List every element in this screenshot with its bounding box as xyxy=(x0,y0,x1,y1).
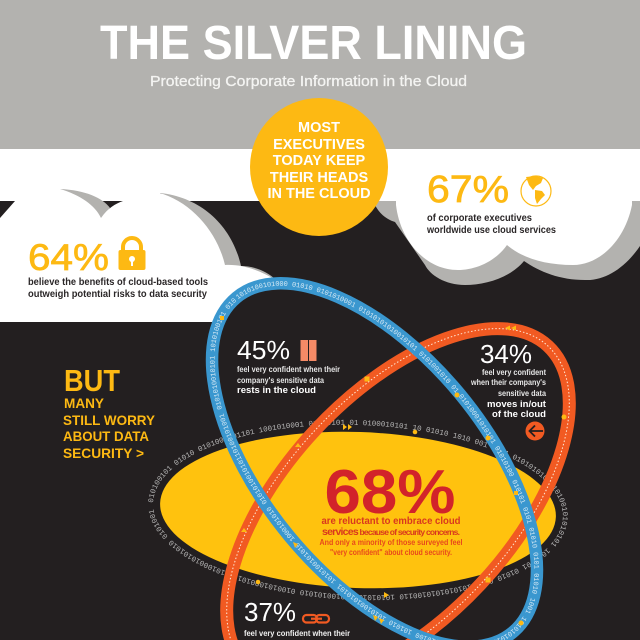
text: 68% caption: are reluctant to embrace cloud xyxy=(322,515,460,527)
cloud: left xyxy=(0,189,276,322)
text: 68% caption xyxy=(320,515,462,557)
white band xyxy=(0,149,640,201)
yellow ellipse xyxy=(157,425,559,595)
orange orbit xyxy=(165,269,631,640)
stat: 45% xyxy=(237,335,340,396)
text: 34% caption: when their company's xyxy=(470,378,546,387)
text: 64% caption: outweigh potential risks to data security xyxy=(28,289,207,300)
blue orbit markers xyxy=(220,316,524,626)
text: 45% caption: feel very confident when their xyxy=(237,365,340,374)
icon: chain link xyxy=(303,615,329,622)
heading: but many still worry: BUT xyxy=(64,363,120,398)
heading: but many still worry: STILL WORRY xyxy=(63,412,156,428)
subtitle: Protecting Corporate Information in the Cloud xyxy=(150,73,467,90)
text: 34% caption xyxy=(470,368,547,420)
heading: but many still worry xyxy=(63,363,156,461)
heading: but many still worry: SECURITY > xyxy=(63,445,144,461)
icon: globe xyxy=(521,176,551,206)
text: 34% caption: sensitive data xyxy=(498,389,546,398)
title: THE SILVER LINING xyxy=(100,17,527,70)
stat: 37% xyxy=(244,597,350,638)
icon: pause bars xyxy=(300,340,316,361)
stat: 67%: 67% xyxy=(427,169,509,211)
text: 67% caption: worldwide use cloud services xyxy=(426,225,556,236)
ring markers xyxy=(256,424,417,598)
text: 45% caption: company's sensitive data xyxy=(237,376,324,385)
text: 34% caption: feel very confident xyxy=(482,368,546,377)
text: 68% caption: services because of security concerns. xyxy=(322,526,460,538)
yellow circle callout: IN THE CLOUD xyxy=(267,186,371,202)
yellow circle callout: MOST xyxy=(298,120,340,136)
stat: 68% xyxy=(320,458,462,557)
text: 67% caption: of corporate executives xyxy=(427,213,532,224)
grey header band xyxy=(0,0,640,149)
text: 68% caption: And only a minority of those surveyed feel xyxy=(320,538,462,547)
text: 67% caption xyxy=(426,213,556,236)
orbit markers xyxy=(241,326,566,582)
yellow circle callout: EXECUTIVES xyxy=(273,137,365,153)
stat: 37%: 37% xyxy=(244,597,296,627)
stat: 68%: 68% xyxy=(324,458,456,527)
text: 34% caption: of the cloud xyxy=(492,409,546,420)
text: 68% caption: "very confident" about cloud security. xyxy=(330,548,452,557)
text: 64% caption xyxy=(28,277,208,300)
yellow circle callout xyxy=(250,98,388,236)
stat: 45%: 45% xyxy=(237,335,290,365)
text: 64% caption: believe the benefits of cloud-based tools xyxy=(28,277,208,288)
stat: 64%: 64% xyxy=(28,237,109,278)
icon: arrow circle xyxy=(526,422,544,440)
text: 45% caption xyxy=(237,365,340,396)
text: 45% caption: rests in the cloud xyxy=(237,385,316,396)
yellow circle callout: THEIR HEADS xyxy=(270,170,368,186)
yellow circle callout: TODAY KEEP xyxy=(273,153,366,169)
stat: 34%: 34% xyxy=(480,339,532,369)
text: 37% caption: feel very confident when their xyxy=(244,629,350,638)
icon: padlock xyxy=(118,238,146,270)
text: 34% caption: moves in/out xyxy=(487,399,547,410)
heading: but many still worry: ABOUT DATA xyxy=(63,428,149,444)
cloud: right xyxy=(375,169,640,285)
stat: 34% xyxy=(470,339,547,420)
heading: but many still worry: MANY xyxy=(64,395,105,411)
